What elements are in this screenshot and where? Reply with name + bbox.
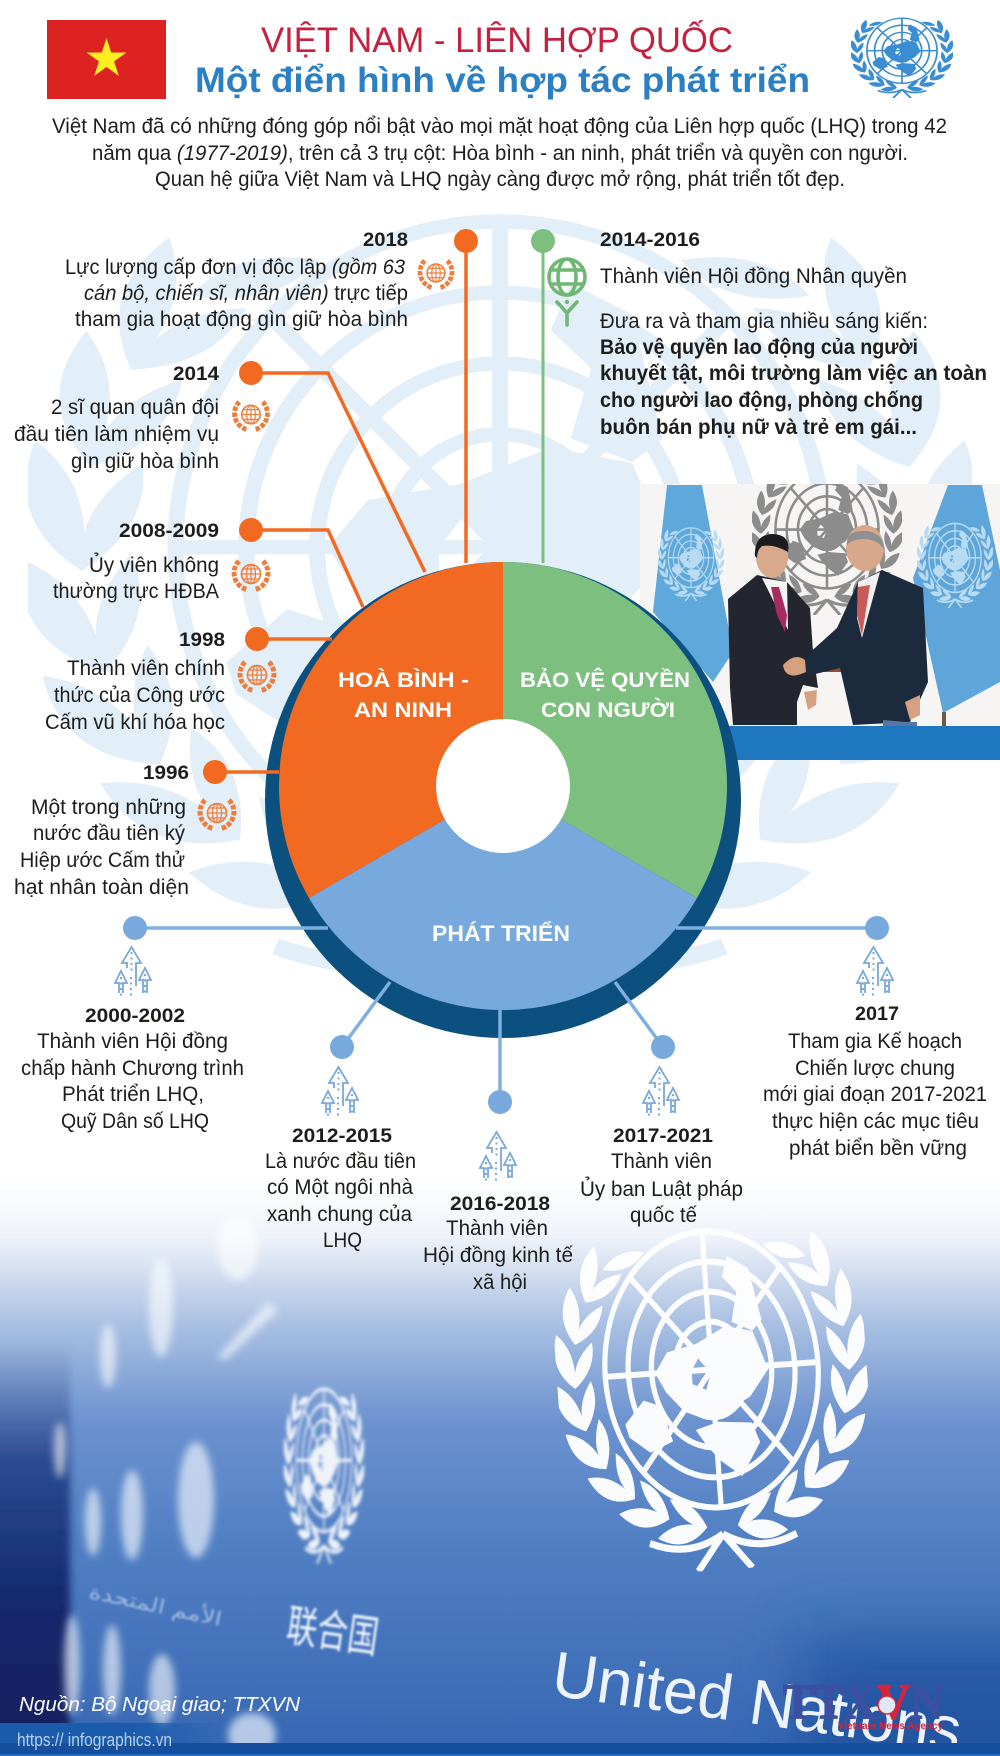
bottom photo: United Nations wall <box>0 1180 1000 1756</box>
source: Nguồn: Bộ Ngoại giao; TTXVN <box>19 1694 301 1716</box>
item: 2016-2018: xã hội <box>473 1270 527 1294</box>
icon: peacekeeping globe <box>240 662 274 690</box>
item: 2018: tham gia hoạt động gìn giữ hòa bình <box>75 307 408 331</box>
item: 2012-2015: xanh chung của <box>267 1202 412 1226</box>
item: 2017: Tham gia Kế hoạch <box>788 1029 962 1053</box>
title <box>195 20 810 100</box>
icon: arrows up <box>643 1067 679 1116</box>
node dots <box>123 229 889 1114</box>
blue bar under photo <box>720 726 1000 760</box>
label: hòa bình: HOÀ BÌNH - <box>338 669 469 692</box>
item: 2018 <box>65 229 452 331</box>
label: hòa bình: AN NINH <box>354 699 452 722</box>
right flag <box>913 485 1000 713</box>
item: 2008-2009 <box>53 520 268 603</box>
right corner shade <box>784 1608 1000 1743</box>
item: 2008-2009: 2008-2009 <box>119 520 219 542</box>
item: 2014-2016: Đưa ra và tham gia nhiều sáng kiến: <box>600 309 928 333</box>
pie: three pillars <box>279 562 727 1010</box>
connector lines <box>135 241 877 1102</box>
item: 2000-2002: Phát triển LHQ, <box>62 1082 204 1106</box>
right man <box>805 570 928 725</box>
left dark strip <box>0 1340 70 1740</box>
item: 2017-2021 <box>580 1067 743 1227</box>
item: 2014-2016: 2014-2016 <box>600 229 700 251</box>
label: quyền con người: BẢO VỆ QUYỀN <box>520 668 690 692</box>
subtitle: Một điển hình về hợp tác phát triển <box>195 61 810 100</box>
segment: quyền con người <box>503 562 727 898</box>
item: 2008-2009: thường trực HĐBA <box>53 579 220 603</box>
icon: peacekeeping globe <box>235 402 267 430</box>
intro text <box>52 114 947 191</box>
item: 2017-2021: quốc tế <box>630 1203 697 1227</box>
website: https:// infographics.vn <box>17 1730 172 1750</box>
icon: arrows up <box>857 947 893 996</box>
item: 2014: gìn giữ hòa bình <box>71 449 219 473</box>
item: 2012-2015: LHQ <box>323 1228 362 1252</box>
footer bar <box>0 1723 1000 1756</box>
title: VIỆT NAM - LIÊN HỢP QUỐC <box>261 20 733 60</box>
intro text: Việt Nam đã có những đóng góp nổi bật vào mọi mặt hoạt động của Liên hợp quốc (LHQ) trong 42 <box>52 114 947 138</box>
item: 2012-2015 <box>265 1067 416 1252</box>
item: 2017-2021: 2017-2021 <box>613 1125 713 1147</box>
item: 1998: Thành viên chính <box>67 656 225 680</box>
item: 2014-2016: khuyết tật, môi trường làm việc an toàn <box>600 361 987 385</box>
icon: arrows up <box>480 1132 516 1181</box>
item: 1998: Cấm vũ khí hóa học <box>45 710 225 734</box>
chinese name: 联合国 <box>284 1601 382 1663</box>
wall emblem <box>752 484 902 615</box>
intro text: Quan hệ giữa Việt Nam và LHQ ngày càng được mở rộng, phát triển tốt đẹp. <box>155 167 845 191</box>
item: 2000-2002: chấp hành Chương trình <box>21 1056 244 1080</box>
item: 2014: 2014 <box>173 363 219 385</box>
item: 1996: Một trong những <box>31 795 186 819</box>
item: 1996 <box>14 762 234 899</box>
icon: peacekeeping globe <box>234 561 268 590</box>
item: 2016-2018: Hội đồng kinh tế <box>423 1243 573 1267</box>
item: 2017-2021: Thành viên <box>611 1149 712 1173</box>
item: 1998: thức của Công ước <box>54 683 225 707</box>
icon: arrows up <box>322 1067 358 1116</box>
item: 2014-2016: cho người lao động, phòng chống <box>600 388 923 412</box>
segment: phát triển <box>309 786 697 1010</box>
blurred background emblems <box>54 1216 278 1726</box>
arabic name: الأمم المتحدة <box>87 1579 224 1631</box>
photo: leaders shaking hands <box>640 470 1000 726</box>
item: 2000-2002: 2000-2002 <box>85 1005 185 1027</box>
label: phát triển: PHÁT TRIỂN <box>432 921 570 946</box>
item: 2018: Lực lượng cấp đơn vị độc lập (gồm 63 <box>65 255 405 279</box>
item: 2014-2016 <box>549 229 987 439</box>
icon: arrows up <box>115 947 151 996</box>
item: 1998 <box>45 629 274 734</box>
intro text: năm qua (1977-2019), trên cả 3 trụ cột: Hòa bình - an ninh, phát triển và quyền con người. <box>92 141 908 165</box>
item: 2014-2016: buôn bán phụ nữ và trẻ em gái... <box>600 415 917 439</box>
item: 2000-2002: Thành viên Hội đồng <box>37 1029 228 1053</box>
item: 2014-2016: Thành viên Hội đồng Nhân quyền <box>600 264 907 288</box>
ring behind the wheel <box>265 562 741 1038</box>
item: 2014 <box>14 363 267 473</box>
distant emblems <box>282 1389 366 1564</box>
item: 2012-2015: Là nước đầu tiên <box>265 1149 416 1173</box>
item: 2017: mới giai đoạn 2017-2021 <box>763 1082 987 1106</box>
item: 1996: 1996 <box>143 762 189 784</box>
TTXVN logo: TTXVN <box>783 1673 943 1729</box>
item: 2012-2015: có Một ngôi nhà <box>267 1175 413 1199</box>
left flag <box>653 485 733 682</box>
icon: peacekeeping globe <box>420 261 452 288</box>
large emblem <box>541 1220 886 1581</box>
center hole <box>436 719 570 853</box>
item: 2017: Chiến lược chung <box>795 1056 955 1080</box>
label: quyền con người <box>520 668 690 722</box>
item: 2014-2016: Bảo vệ quyền lao động của người <box>600 335 918 359</box>
item: 2018: 2018 <box>363 229 408 251</box>
item: 2017: 2017 <box>855 1003 899 1025</box>
item: 2018: cán bộ, chiến sĩ, nhân viên) trực tiếp <box>84 281 408 305</box>
icon: green globe and person <box>549 259 585 325</box>
item: 1996: Hiệp ước Cấm thử <box>20 848 185 872</box>
icon: peacekeeping globe <box>200 800 234 828</box>
TTXVN logo: Vietnam News Agency <box>838 1721 943 1732</box>
item: 2017: phát biển bền vững <box>789 1136 967 1160</box>
item: 2016-2018 <box>423 1132 573 1294</box>
item: 2000-2002: Quỹ Dân số LHQ <box>61 1109 209 1133</box>
item: 2016-2018: Thành viên <box>446 1216 548 1240</box>
item: 1996: nước đầu tiên ký <box>33 821 185 845</box>
flag of Vietnam <box>47 20 166 99</box>
item: 2017 <box>763 947 987 1160</box>
item: 2017: thực hiện các mục tiêu <box>772 1109 979 1133</box>
item: 2014: đầu tiên làm nhiệm vụ <box>14 422 219 446</box>
item: 2017-2021: Ủy ban Luật pháp <box>580 1176 743 1201</box>
label: quyền con người: CON NGƯỜI <box>541 698 675 722</box>
item: 1996: hạt nhân toàn diện <box>14 875 189 899</box>
item: 2014: 2 sĩ quan quân đội <box>51 395 219 419</box>
watermark: UN emblem <box>10 220 990 1020</box>
item: 2008-2009: Ủy viên không <box>89 552 219 577</box>
item: 2012-2015: 2012-2015 <box>292 1125 392 1147</box>
item: 2016-2018: 2016-2018 <box>450 1193 550 1215</box>
item: 1998: 1998 <box>179 629 225 651</box>
label: hòa bình <box>338 669 469 722</box>
UN emblem logo <box>849 18 955 98</box>
segment: hòa bình - an ninh <box>279 562 503 898</box>
left man <box>728 575 818 725</box>
item: 2000-2002 <box>21 947 244 1133</box>
